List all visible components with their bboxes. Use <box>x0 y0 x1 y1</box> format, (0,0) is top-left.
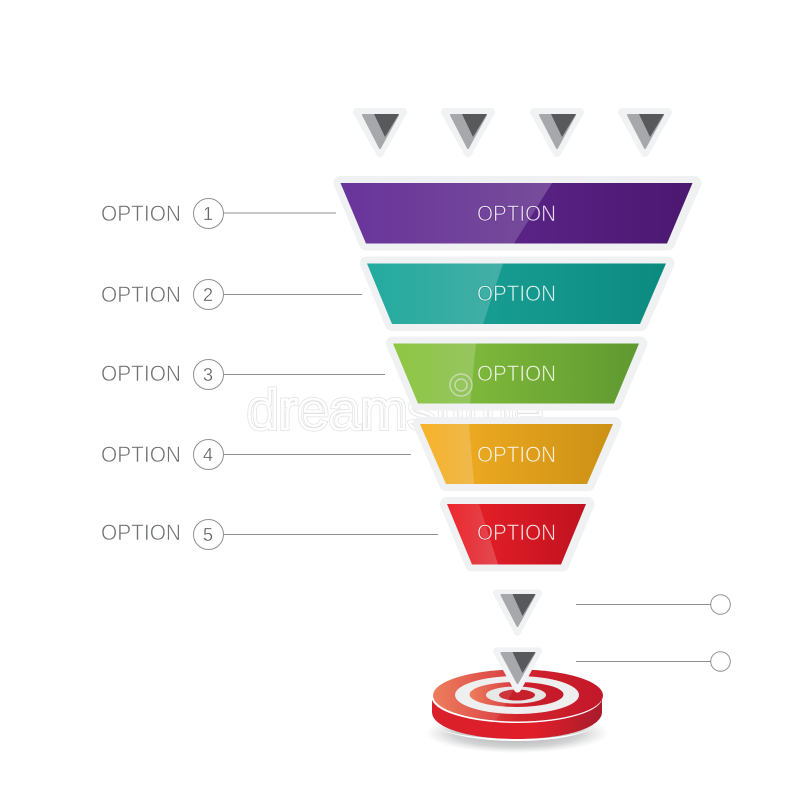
arrows row above funnel <box>357 112 668 153</box>
funnel band 3: green <box>393 344 640 404</box>
left label 3: 3 <box>203 365 213 385</box>
left label 4: 4 <box>203 445 213 465</box>
left label 5 <box>101 520 438 550</box>
funnel band 2: teal <box>367 264 668 324</box>
target face rings <box>433 670 603 722</box>
target <box>425 669 609 753</box>
watermark spiral <box>450 374 472 396</box>
arrow 3 <box>534 112 580 153</box>
funnel band 4: amber <box>420 424 614 484</box>
left label 2: 2 <box>203 285 213 305</box>
funnel band 1: purple: OPTION <box>477 201 556 226</box>
watermark: dreamstime <box>247 378 543 441</box>
funnel band 4: amber: OPTION <box>477 442 556 467</box>
target side <box>432 700 602 739</box>
left label 3 <box>101 360 385 390</box>
left label 1 <box>101 198 336 228</box>
funnel band 1: purple <box>340 183 694 244</box>
arrow 2 <box>445 112 491 153</box>
left label 5: OPTION <box>101 520 181 545</box>
funnel band 5: red: OPTION <box>477 520 556 545</box>
target shadow <box>425 713 609 753</box>
right callout line 2 <box>576 652 730 671</box>
left label 3: OPTION <box>101 361 181 386</box>
target rim <box>432 671 602 723</box>
funnel band 3: green: OPTION <box>477 361 556 386</box>
arrow 1 <box>357 112 403 153</box>
arrow 4 <box>622 112 668 153</box>
left label 2 <box>101 280 362 310</box>
left label 5: 5 <box>203 525 213 545</box>
left label 4 <box>101 440 411 470</box>
arrow into target <box>496 651 538 689</box>
left label 1: OPTION <box>101 201 181 226</box>
funnel band 5: red <box>447 504 588 564</box>
funnel band 2: teal: OPTION <box>477 281 556 306</box>
left label 1: 1 <box>203 204 213 224</box>
left label 2: OPTION <box>101 282 181 307</box>
left label 4: OPTION <box>101 442 181 467</box>
right callout line 1 <box>576 595 730 614</box>
watermark: dreamstime <box>247 378 543 441</box>
arrow below funnel <box>496 593 538 632</box>
